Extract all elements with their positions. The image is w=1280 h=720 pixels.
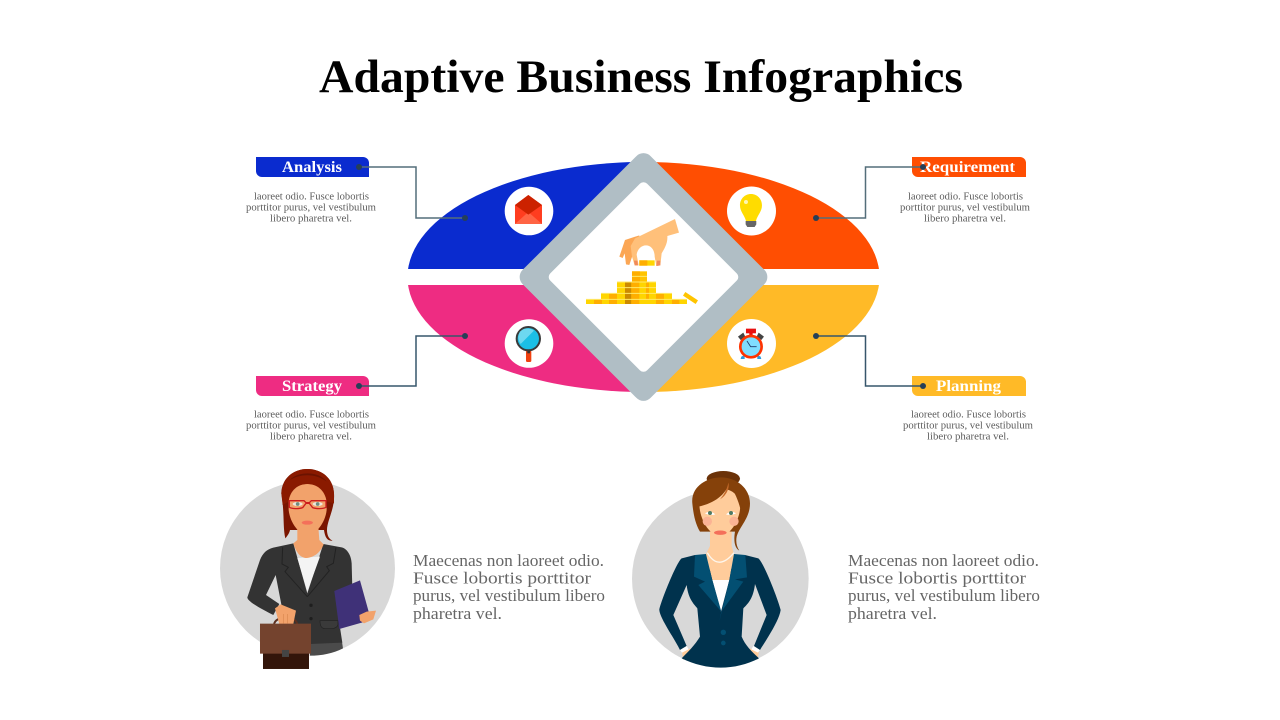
right hand bbox=[359, 611, 376, 623]
icon: hand placing coins bbox=[586, 219, 698, 304]
title: Adaptive Business Infographics bbox=[319, 51, 963, 103]
fringe bbox=[695, 481, 747, 510]
callout: requirement: libero pharetra vel. bbox=[924, 214, 1006, 224]
face bbox=[289, 484, 327, 535]
left hand bbox=[275, 604, 296, 624]
fingertips bbox=[634, 261, 660, 266]
callout: analysis: porttitor purus, vel vestibulum bbox=[246, 202, 376, 214]
text block: left paragraph bbox=[413, 551, 605, 623]
jacket bbox=[247, 543, 352, 644]
label bbox=[912, 376, 1026, 396]
callout: planning bbox=[813, 333, 1033, 442]
buttons bbox=[721, 630, 726, 635]
description: laoreet odio. Fusce lobortis bbox=[908, 192, 1023, 202]
backdrop circle bbox=[220, 481, 395, 656]
held coin bbox=[639, 260, 655, 266]
text block: right paragraph: Maecenas non laoreet odio. bbox=[848, 551, 1039, 570]
description: laoreet odio. Fusce lobortis bbox=[254, 192, 369, 202]
icon badge: analysis bbox=[505, 187, 553, 235]
icon badge: planning bbox=[727, 319, 776, 368]
icon badge: requirement bbox=[727, 186, 776, 236]
label bbox=[256, 157, 369, 177]
hair bbox=[692, 477, 750, 551]
callout: analysis bbox=[246, 157, 468, 224]
description: laoreet odio. Fusce lobortis bbox=[254, 410, 369, 420]
skirt bbox=[310, 642, 343, 656]
icon: light bulb bbox=[740, 194, 762, 227]
diamond inner bbox=[547, 180, 740, 374]
text block: left paragraph: Maecenas non laoreet odio. bbox=[413, 551, 604, 570]
segment: planning yellow bbox=[656, 285, 879, 392]
callout: analysis: Analysis bbox=[282, 159, 342, 176]
icon badge: strategy bbox=[505, 319, 553, 368]
callout: planning: porttitor purus, vel vestibulum bbox=[903, 420, 1033, 432]
necklace bbox=[707, 553, 734, 562]
label bbox=[256, 376, 369, 396]
callout: requirement: porttitor purus, vel vestibulum bbox=[900, 202, 1030, 214]
segment: strategy pink bbox=[408, 285, 630, 392]
connector bbox=[359, 336, 465, 386]
segment: analysis blue bbox=[408, 162, 630, 269]
cheeks bbox=[703, 517, 712, 526]
illustration: businesswoman with briefcase bbox=[220, 469, 395, 669]
callout: strategy: libero pharetra vel. bbox=[270, 432, 352, 442]
back fingers bbox=[619, 235, 639, 265]
folder bbox=[334, 580, 371, 629]
hand bbox=[631, 219, 679, 266]
icon: envelope bbox=[515, 195, 542, 224]
callout: planning: Planning bbox=[936, 378, 1001, 395]
icon: magnifier bbox=[517, 327, 540, 362]
lips bbox=[302, 521, 313, 525]
callout: planning: libero pharetra vel. bbox=[927, 432, 1009, 442]
fringe bbox=[281, 469, 334, 505]
text block: right paragraph: Fusce lobortis porttitor bbox=[848, 568, 1026, 588]
connector bbox=[816, 167, 923, 218]
neck and chest bbox=[706, 532, 734, 580]
callout: requirement: Requirement bbox=[920, 159, 1016, 176]
diamond frame bbox=[516, 149, 771, 405]
label bbox=[912, 157, 1026, 177]
callout: analysis: libero pharetra vel. bbox=[270, 214, 352, 224]
text block: left paragraph: pharetra vel. bbox=[413, 604, 502, 623]
coin stacks bbox=[586, 271, 698, 304]
text block: right paragraph: purus, vel vestibulum libero bbox=[848, 586, 1040, 605]
neck bbox=[293, 527, 324, 558]
eyes bbox=[705, 512, 715, 515]
shirt bbox=[297, 557, 320, 592]
hair bun bbox=[707, 471, 740, 486]
callout: strategy: Strategy bbox=[282, 378, 342, 395]
jacket bbox=[659, 555, 781, 668]
hands bbox=[682, 649, 692, 660]
shirt bbox=[712, 580, 729, 612]
cuffs bbox=[680, 646, 689, 653]
glasses bbox=[289, 501, 326, 509]
text block: right paragraph: pharetra vel. bbox=[848, 604, 937, 623]
lapels bbox=[282, 547, 336, 597]
text block: right paragraph bbox=[848, 551, 1040, 623]
callout: strategy bbox=[246, 333, 468, 442]
text block: left paragraph: purus, vel vestibulum libero bbox=[413, 586, 605, 605]
segment: requirement orange bbox=[656, 162, 879, 269]
central ellipse diagram bbox=[408, 149, 880, 405]
callout: requirement bbox=[813, 157, 1030, 224]
icon: alarm clock bbox=[738, 329, 764, 359]
hair back bbox=[281, 469, 334, 541]
buttons and pocket bbox=[320, 621, 338, 629]
connector bbox=[816, 336, 923, 386]
connector bbox=[359, 167, 465, 218]
backdrop circle bbox=[632, 490, 809, 667]
lapels bbox=[694, 554, 721, 612]
lips bbox=[714, 530, 727, 535]
illustration: businesswoman hands on hips bbox=[632, 471, 809, 668]
face bbox=[699, 488, 740, 536]
callout: strategy: porttitor purus, vel vestibulum bbox=[246, 420, 376, 432]
text block: left paragraph: Fusce lobortis porttitor bbox=[413, 568, 591, 588]
briefcase bbox=[263, 652, 309, 669]
briefcase handle bbox=[274, 617, 297, 625]
description: laoreet odio. Fusce lobortis bbox=[911, 410, 1026, 420]
